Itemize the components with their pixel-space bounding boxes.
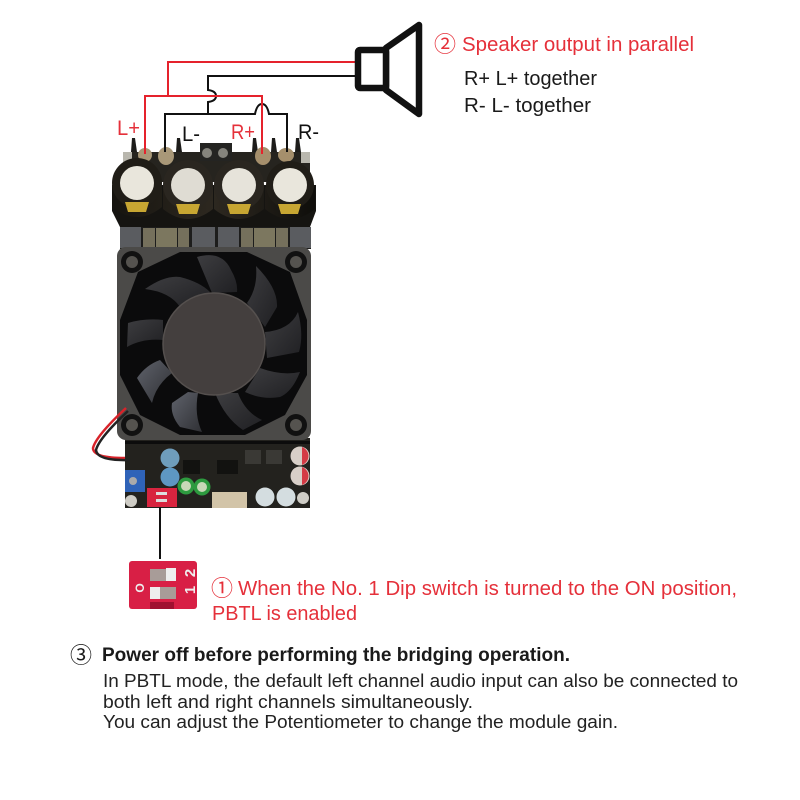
red speaker wires [145,62,357,154]
icon: dip switch enlarged: 2 [182,569,199,577]
body line 3: You can adjust the Potentiometer to change the module gain. [103,711,618,732]
amplifier board [93,138,316,508]
dip switch leader line [159,507,161,559]
number 3: ③ [70,643,92,668]
note 1: PBTL switch [211,576,737,625]
terminal label: R-: R- [298,121,319,144]
positive wiring note: R+ L+ together [464,68,597,90]
body line 2: both left and right channels simultaneously. [103,691,473,712]
fan power wire [93,408,130,460]
terminal label: L-: L- [182,123,200,146]
terminal label: L+: L+ [117,117,140,140]
icon: dip switch enlarged: O [133,583,147,593]
output terminals [123,138,310,182]
note 1 second line: PBTL is enabled [212,603,357,625]
lower circuit board [125,438,310,508]
number 2: ② [434,32,456,57]
note 2: speaker output [434,32,694,117]
capacitors [112,158,316,227]
note 3: power off [70,643,738,732]
number 1: ① [211,576,233,601]
body line 1: In PBTL mode, the default left channel audio input can also be connected to [103,670,738,691]
terminal label: R+: R+ [231,121,255,144]
icon: speaker [358,25,419,114]
negative wiring note: R- L- together [464,95,591,117]
icon: dip switch enlarged [129,561,199,609]
icon: dip switch enlarged: 1 [182,586,199,594]
black speaker wires [165,76,356,152]
note 1 first line: When the No. 1 Dip switch is turned to the ON position, [238,578,737,600]
note 3 heading: Power off before performing the bridging operation. [102,644,570,666]
fan [117,247,311,440]
note 2 heading: Speaker output in parallel [462,34,694,56]
heat sink fins [120,227,311,249]
